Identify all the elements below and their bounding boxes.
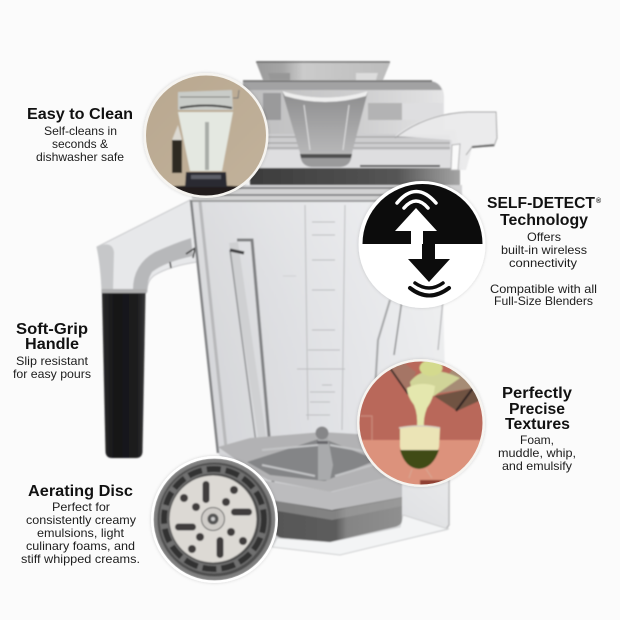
text: aerating disc: Perfect for — [52, 500, 110, 514]
text: soft-grip handle: Slip resistant — [16, 354, 89, 368]
text: self-detect technology: SELF-DETECT — [487, 195, 596, 212]
photo: self-cleaning blender — [140, 70, 270, 200]
text: aerating disc: culinary foams, and — [26, 539, 135, 553]
text: easy to clean: dishwasher safe — [36, 150, 124, 164]
text: perfectly precise textures: Perfectly — [502, 385, 572, 402]
text: easy to clean — [27, 106, 133, 164]
text: soft-grip handle: for easy pours — [13, 367, 91, 381]
base collar — [250, 474, 402, 542]
text: soft-grip handle — [13, 321, 91, 381]
pour spout — [395, 112, 497, 170]
text: easy to clean: seconds & — [52, 137, 108, 151]
photo: matcha foam pour — [355, 355, 490, 490]
text: soft-grip handle: Handle — [25, 336, 79, 353]
blender jar illustration — [97, 61, 497, 555]
text: aerating disc: stiff whipped creams. — [21, 552, 140, 566]
text: perfectly precise textures: Foam, — [520, 433, 554, 447]
text: self-detect technology: Compatible with all — [490, 282, 597, 296]
text: perfectly precise textures: muddle, whip, — [498, 446, 576, 460]
text: perfectly precise textures: Precise — [509, 401, 565, 418]
top cap — [256, 61, 390, 80]
text: perfectly precise textures: Textures — [505, 416, 570, 433]
text: aerating disc: consistently creamy — [26, 513, 136, 527]
text: easy to clean: Easy to Clean — [27, 106, 133, 123]
text: self-detect technology: Technology — [500, 212, 588, 229]
text: perfectly precise textures: and emulsify — [502, 459, 572, 473]
measurement scale — [283, 205, 345, 430]
text: self-detect technology: Full-Size Blenders — [494, 294, 593, 308]
icon: self-detect wireless arrows — [358, 181, 486, 308]
lid — [243, 81, 444, 134]
text: aerating disc — [21, 483, 140, 566]
handle — [97, 200, 197, 458]
inner ridges — [229, 240, 402, 505]
text: self-detect technology — [487, 195, 602, 308]
text: aerating disc: Aerating Disc — [28, 483, 133, 500]
text: perfectly precise textures — [498, 385, 576, 473]
text: self-detect technology: ® — [596, 197, 602, 205]
photo: aerating disc — [151, 456, 278, 583]
text: self-detect technology: Offers — [527, 230, 561, 244]
text: soft-grip handle: Soft-Grip — [16, 321, 88, 338]
jar body — [191, 200, 462, 555]
text: self-detect technology: built-in wireless — [501, 243, 587, 257]
lid shelf and dark seal — [192, 130, 462, 202]
lid plug cup — [282, 91, 368, 167]
text: easy to clean: Self-cleans in — [44, 124, 117, 138]
text: self-detect technology: connectivity — [509, 256, 577, 270]
text: aerating disc: emulsions, light — [37, 526, 125, 540]
blade floor — [218, 426, 402, 492]
